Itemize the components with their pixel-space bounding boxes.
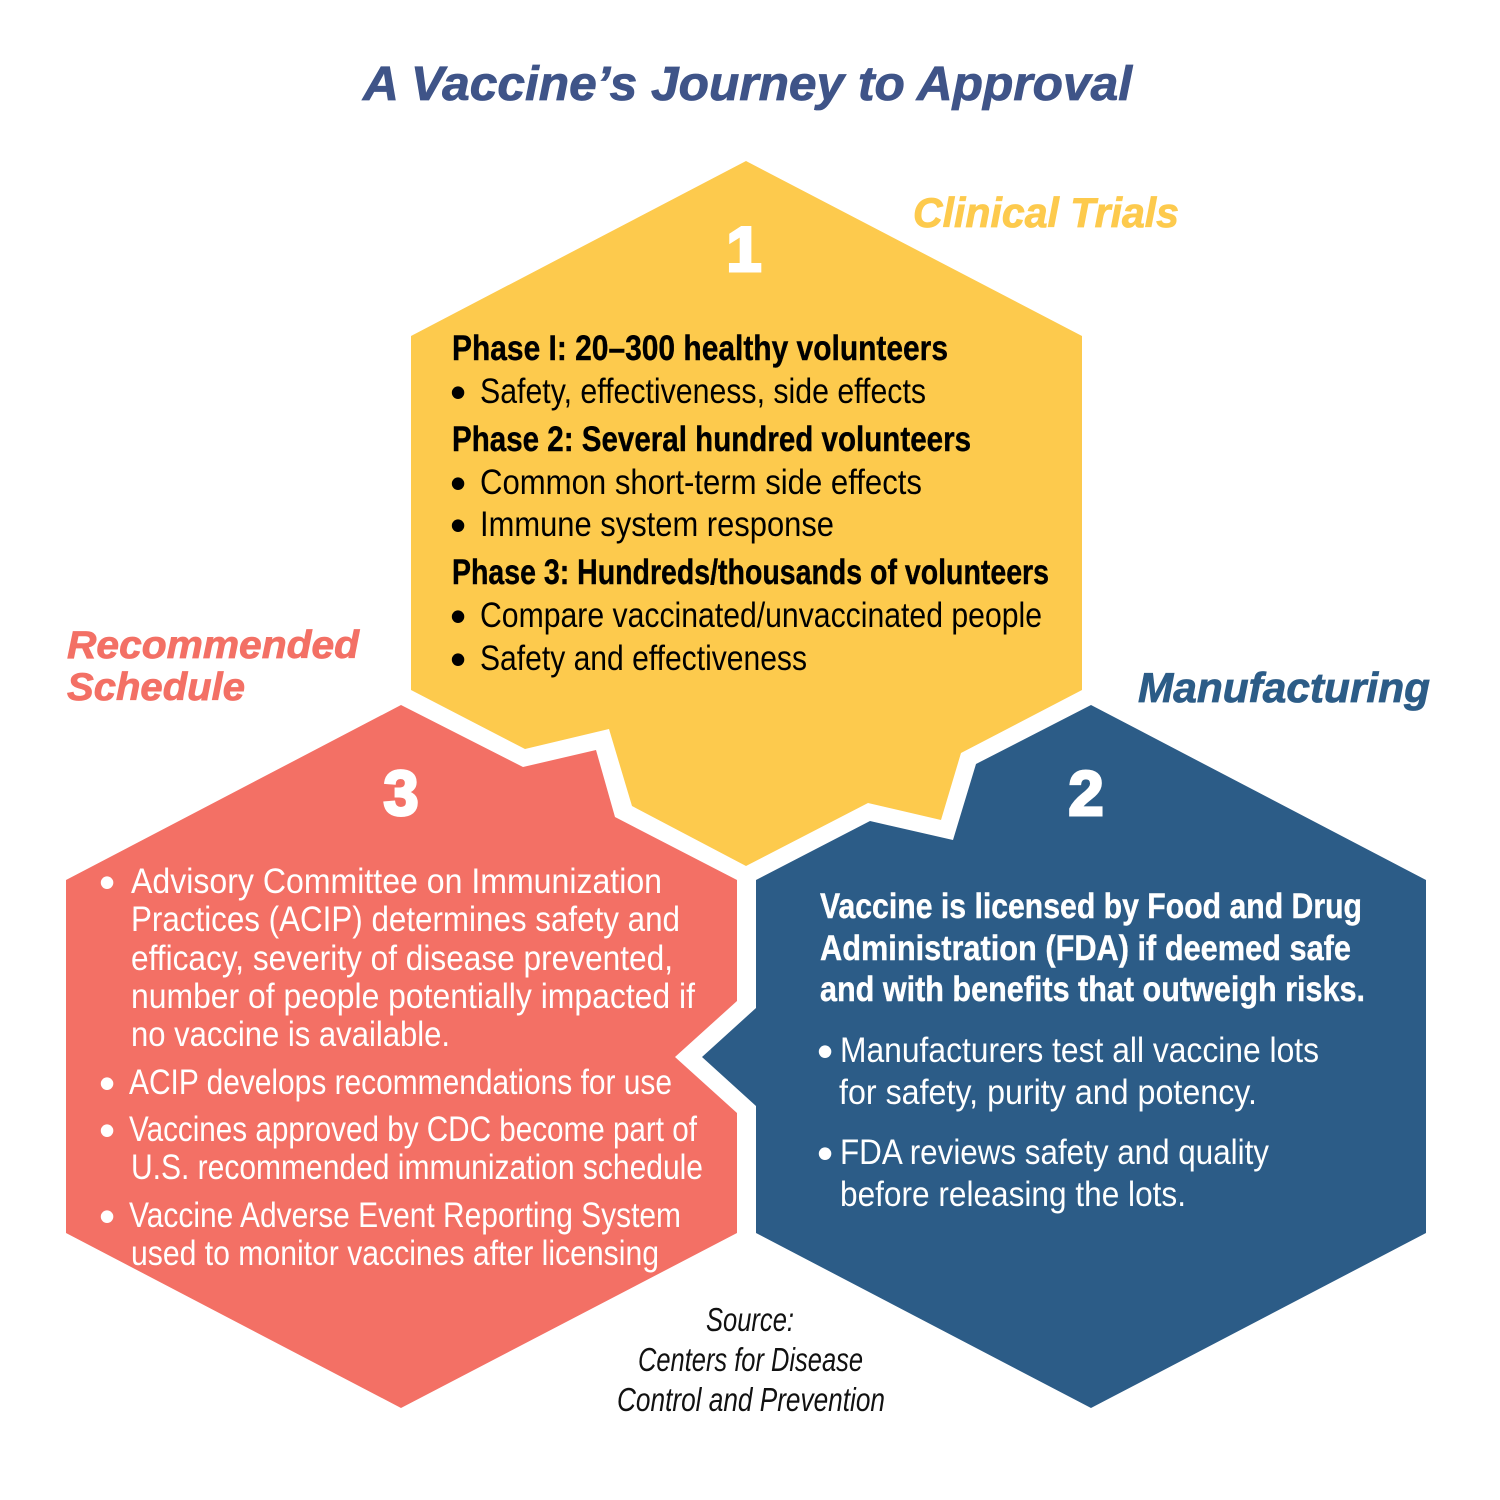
clinical trials text: • [450,590,466,642]
source note [617,1301,885,1418]
clinical trials text: Compare vaccinated/unvaccinated people [480,596,1042,635]
manufacturing text: Administration (FDA) if deemed safe [820,929,1351,968]
clinical trials text: Common short-term side effects [480,463,922,502]
panel: clinical trials hexagon [411,161,1082,866]
manufacturing text: FDA reviews safety and quality [840,1133,1269,1172]
recommended schedule text: efficacy, severity of disease prevented, [131,939,673,978]
recommended schedule text: • [99,1057,115,1109]
panel: manufacturing hexagon [702,705,1426,1408]
heading: recommended schedule [67,624,360,709]
clinical trials text: Phase 2: Several hundred volunteers [452,420,971,459]
recommended schedule text [99,856,703,1273]
clinical trials text: Immune system response [480,505,834,544]
panel: recommended schedule hexagon [66,705,737,1408]
manufacturing text: Manufacturers test all vaccine lots [840,1031,1319,1070]
recommended schedule text: Vaccines approved by CDC become part of [129,1110,697,1149]
recommended schedule text: used to monitor vaccines after licensing [131,1234,659,1273]
recommended schedule text: Practices (ACIP) determines safety and [131,900,680,939]
recommended schedule text: U.S. recommended immunization schedule [131,1148,703,1187]
manufacturing text: and with benefits that outweigh risks. [820,970,1365,1009]
clinical trials text: • [450,457,466,509]
clinical trials text: • [450,366,466,418]
manufacturing text: Vaccine is licensed by Food and Drug [820,887,1362,926]
heading: recommended schedule: Schedule [67,666,245,709]
manufacturing text: before releasing the lots. [840,1175,1186,1214]
number 3: 3 [383,759,419,829]
source note: Control and Prevention [617,1381,885,1418]
recommended schedule text: Advisory Committee on Immunization [131,862,662,901]
recommended schedule text: • [99,1104,115,1156]
heading: recommended schedule: Recommended [67,624,360,667]
clinical trials text: • [450,633,466,685]
clinical trials text: Phase 3: Hundreds/thousands of volunteers [452,553,1049,592]
clinical trials text: • [450,499,466,551]
clinical trials text: Phase I: 20–300 healthy volunteers [452,329,948,368]
manufacturing text [817,887,1365,1214]
recommended schedule text: • [99,856,115,908]
clinical trials text: Safety and effectiveness [480,639,807,678]
heading: clinical trials: Clinical Trials [913,189,1179,236]
clinical trials text [450,329,1049,685]
manufacturing text: for safety, purity and potency. [839,1073,1257,1112]
clinical trials text: Safety, effectiveness, side effects [480,372,926,411]
recommended schedule text: number of people potentially impacted if [131,977,695,1016]
heading: manufacturing: Manufacturing [1138,664,1430,711]
recommended schedule text: Vaccine Adverse Event Reporting System [129,1196,681,1235]
title: A Vaccine’s Journey to Approval [362,58,1134,111]
manufacturing text: • [817,1025,833,1077]
source note: Centers for Disease [638,1341,863,1378]
manufacturing text: • [817,1127,833,1179]
recommended schedule text: no vaccine is available. [131,1015,450,1054]
source note: Source: [706,1301,794,1338]
recommended schedule text: ACIP develops recommendations for use [129,1063,672,1102]
number 2: 2 [1068,759,1104,829]
number 1: 1 [726,215,762,285]
recommended schedule text: • [99,1190,115,1242]
